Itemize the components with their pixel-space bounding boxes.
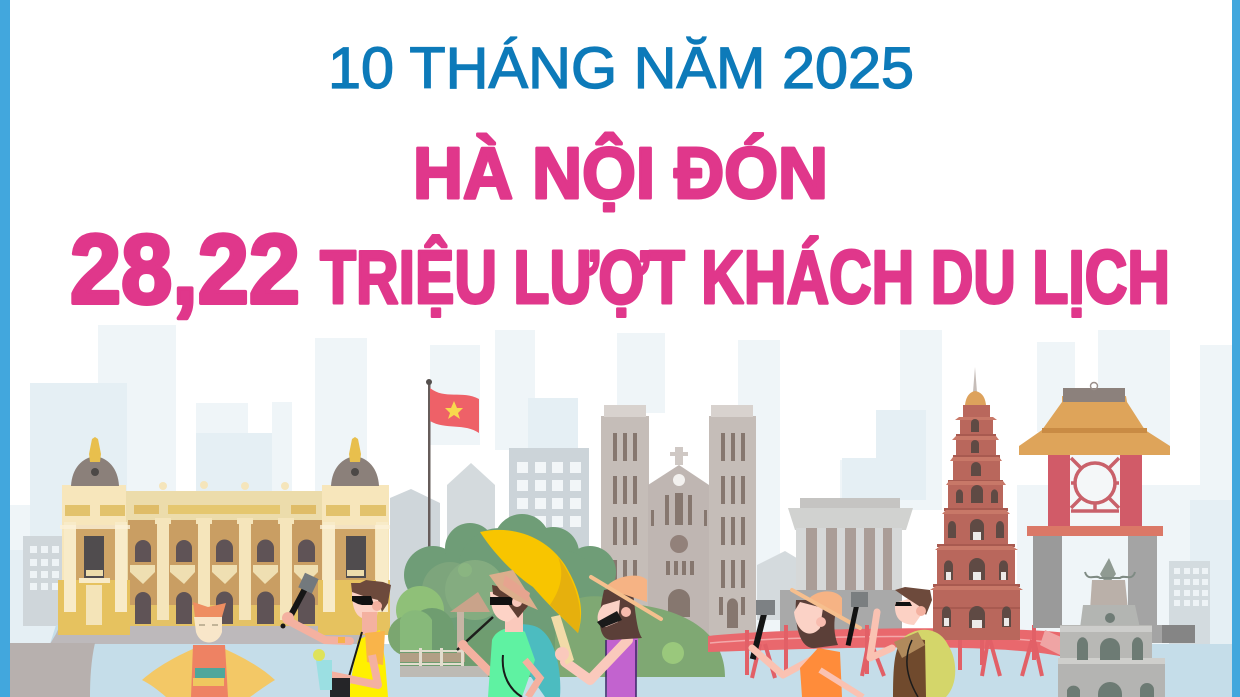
selfie stick [280, 573, 319, 628]
small building left [30, 546, 59, 590]
date heading: 10 THÁNG NĂM 2025 [328, 36, 914, 101]
turtle tower [1058, 558, 1165, 697]
grey silhouette buildings [23, 463, 800, 640]
head [351, 580, 391, 619]
cathedral windows [613, 433, 745, 628]
face [489, 570, 538, 632]
flag [426, 379, 479, 550]
tourist with selfie stick and drink [280, 573, 391, 697]
left border [0, 0, 10, 697]
tourist woman with hat and phone [551, 576, 661, 697]
tourist with umbrella and green shirt [458, 570, 560, 697]
umbrella [457, 530, 581, 650]
highlighted figure: 28,22 [70, 214, 300, 324]
opera house central block [126, 481, 322, 626]
ground and lake [10, 625, 1232, 697]
opera house [58, 437, 390, 635]
dancer figure [142, 602, 275, 697]
thap rua pagoda [930, 367, 1023, 640]
tourist woman in orange with selfie stick [750, 590, 863, 697]
mausoleum [780, 498, 913, 640]
opera house left tower [58, 437, 130, 635]
opera house right tower [318, 437, 390, 635]
the huc gate [1019, 382, 1195, 643]
tourist man with backpack [846, 587, 955, 697]
main title line 1: HÀ NỘI ĐÓN [413, 133, 828, 214]
gate lattice window [1071, 458, 1119, 511]
trees [388, 514, 725, 677]
small building right [1169, 561, 1210, 645]
grey office building [509, 448, 589, 558]
cathedral [601, 405, 756, 641]
small pavilion and fence [400, 592, 490, 677]
skyline background [10, 325, 1232, 645]
right border [1232, 0, 1240, 697]
bridge [708, 618, 1068, 678]
main title line 2 [70, 214, 1170, 324]
